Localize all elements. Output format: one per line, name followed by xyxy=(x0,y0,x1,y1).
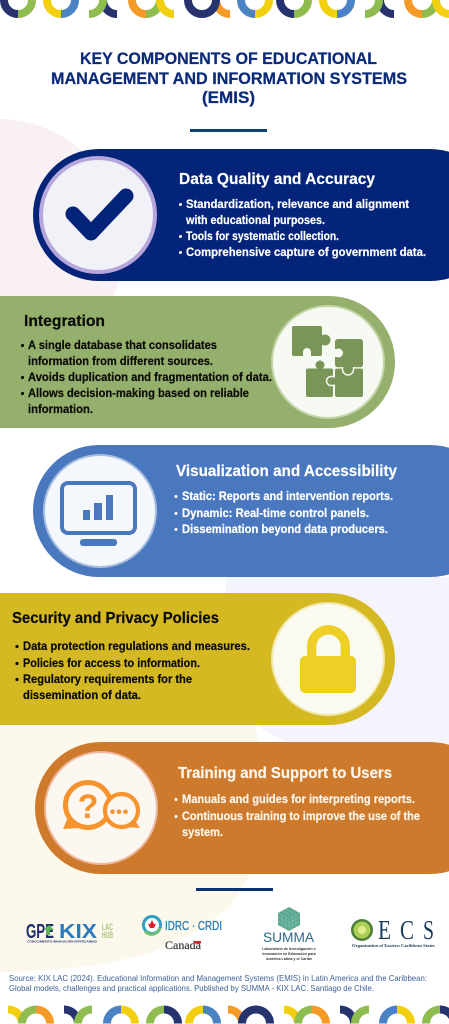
logo: SUMMA: Innovación en Educación para xyxy=(262,952,317,956)
panel: training and support to users xyxy=(35,742,449,874)
title xyxy=(51,49,407,107)
heading: security: Security and Privacy Policies xyxy=(12,610,219,627)
source note: Global models, challenges and practical applications. Published by SUMMA - KIX LAC. Santiago de Chile. xyxy=(9,984,374,993)
bullet list: training: Continuous training to improve the use of the xyxy=(182,809,420,823)
logo: OECS: Organisation of Eastern Caribbean States xyxy=(352,943,435,948)
top decorative arc pattern xyxy=(4,0,449,14)
logo: IDRC CRDI Canada: IDRC · CRDI xyxy=(165,919,222,933)
logo: OECS: C xyxy=(400,915,414,945)
bullet list: security xyxy=(15,639,250,702)
bullet list: data quality: Tools for systematic collection. xyxy=(186,229,339,243)
bullet list: visualization: Dynamic: Real-time control panels. xyxy=(182,506,369,520)
heading: training: Training and Support to Users xyxy=(178,765,392,782)
title: MANAGEMENT AND INFORMATION SYSTEMS xyxy=(51,69,407,88)
bullet list: data quality: Standardization, relevance and alignment xyxy=(186,197,409,211)
icon: puzzle pieces xyxy=(271,305,385,419)
title: KEY COMPONENTS OF EDUCATIONAL xyxy=(80,49,377,68)
logo: GPE KIX LAC Hub: KIX xyxy=(59,921,98,943)
bullet list: data quality: with educational purposes. xyxy=(185,213,325,227)
bullet list: integration: information. xyxy=(28,402,93,416)
logo: GPE KIX LAC Hub: LAC xyxy=(102,922,113,932)
logo: GPE KIX LAC Hub: GPE xyxy=(26,921,54,943)
logo: OECS: E xyxy=(378,915,391,945)
icon: question and chat bubbles: ? xyxy=(78,788,98,826)
icon: monitor with bar chart xyxy=(43,454,157,568)
bullet list: training: Manuals and guides for interpreting reports. xyxy=(182,792,415,806)
bullet list: integration: Avoids duplication and fragmentation of data. xyxy=(28,370,272,384)
source note: Source: KIX LAC (2024). Educational Information and Management Systems (EMIS) in Latin America and the Caribbean: xyxy=(9,974,427,983)
panel: visualization and accessibility xyxy=(33,445,449,577)
bullet list: integration: Allows decision-making based on reliable xyxy=(28,386,249,400)
bullet list: training: system. xyxy=(182,825,223,839)
bullet list: security: dissemination of data. xyxy=(23,688,141,702)
panel: security and privacy policies xyxy=(0,593,395,725)
logo: OECS xyxy=(351,915,435,948)
bullet list: data quality: Comprehensive capture of government data. xyxy=(186,245,426,259)
bullet list: visualization: Static: Reports and intervention reports. xyxy=(182,489,393,503)
bullet list: security: Policies for access to information. xyxy=(23,656,200,670)
logo: GPE KIX LAC Hub: CONOCIMIENTO INNOVACIÓN INTERCAMBIO xyxy=(27,938,98,944)
heading: visualization: Visualization and Accessibility xyxy=(176,463,397,480)
icon: padlock xyxy=(271,602,385,716)
bullet list: security: Regulatory requirements for the xyxy=(23,672,192,686)
logo: SUMMA: América Latina y el Caribe xyxy=(266,957,312,961)
heading: integration: Integration xyxy=(24,313,105,330)
bullet list: integration: information from different sources. xyxy=(28,354,213,368)
logo: IDRC CRDI Canada: Canada xyxy=(165,940,201,952)
panel: data quality and accuracy xyxy=(33,149,449,281)
logo: GPE KIX LAC Hub: HUB xyxy=(102,930,113,940)
bullet list: data quality xyxy=(179,197,426,259)
logo: SUMMA: Laboratorio de Investigación e xyxy=(262,947,316,951)
bullet list: integration: A single database that consolidates xyxy=(28,338,217,352)
title: (EMIS) xyxy=(202,88,255,107)
bullet list: security: Data protection regulations and measures. xyxy=(23,639,250,653)
bottom decorative arc pattern xyxy=(8,1010,449,1024)
logo: IDRC CRDI Canada xyxy=(144,916,222,952)
bullet list: training xyxy=(174,792,420,839)
source note xyxy=(9,974,427,993)
logo: GPE KIX LAC Hub xyxy=(26,921,113,944)
icon: check mark xyxy=(39,156,157,274)
icon: question and chat bubbles xyxy=(44,751,158,865)
bullet list: visualization: Dissemination beyond data producers. xyxy=(182,522,388,536)
bullet list: integration xyxy=(21,338,272,416)
bullet list: visualization xyxy=(174,489,393,536)
panel: integration xyxy=(0,296,395,428)
logo: OECS: S xyxy=(423,915,434,945)
logo: SUMMA xyxy=(262,907,317,961)
heading: data quality: Data Quality and Accuracy xyxy=(179,171,375,188)
logo: SUMMA: SUMMA xyxy=(263,930,314,945)
